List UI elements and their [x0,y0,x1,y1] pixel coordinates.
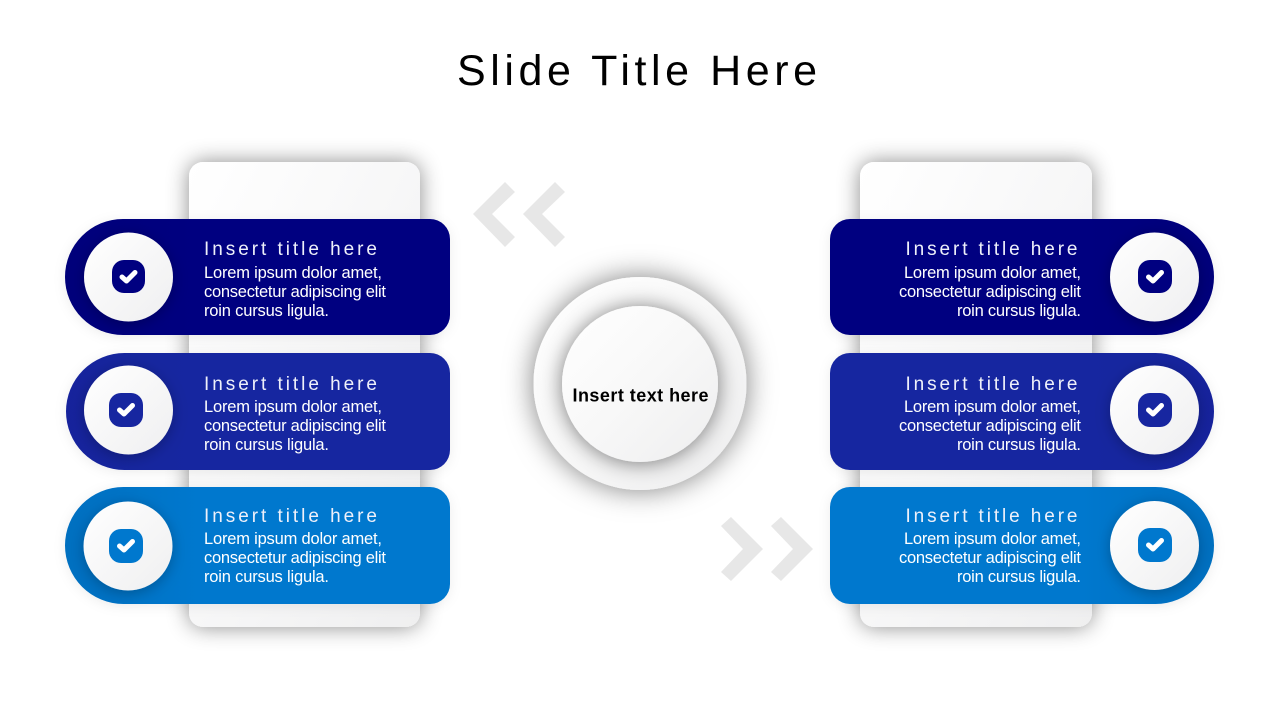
right item 3 [830,487,1214,604]
item text: Lorem ipsum dolor amet, [204,398,382,416]
left item 1 [65,219,450,335]
item text: Lorem ipsum dolor amet, [204,530,382,548]
right item 2 [830,353,1214,470]
item text: roin cursus ligula. [957,436,1081,454]
item text: Lorem ipsum dolor amet, [204,264,382,282]
pill [830,219,1214,335]
item heading: Insert title here [906,374,1078,395]
pill [830,353,1214,470]
item heading: Insert title here [906,506,1078,527]
item text: roin cursus ligula. [204,436,329,454]
pill [830,487,1214,604]
item heading: Insert title here [204,239,377,260]
item text [899,530,1081,586]
arrow: left double chevron [473,182,565,247]
item text: Lorem ipsum dolor amet, [904,398,1081,416]
icon: check badge [1110,366,1199,454]
item text: Lorem ipsum dolor amet, [904,530,1081,548]
item text: roin cursus ligula. [204,302,329,320]
left item 3 [65,487,450,604]
title: Slide Title Here [457,47,817,95]
pill [66,353,450,470]
item text: consectetur adipiscing elit [204,417,386,435]
item text: consectetur adipiscing elit [204,283,386,301]
icon: check badge [84,366,173,454]
central circle [534,277,746,490]
item text: consectetur adipiscing elit [899,283,1081,301]
item heading: Insert title here [906,239,1078,260]
arrow: right double chevron [721,517,813,581]
item text: Lorem ipsum dolor amet, [904,264,1081,282]
icon: check badge [1110,232,1199,322]
item text: consectetur adipiscing elit [899,549,1081,567]
item text [899,398,1081,454]
item heading: Insert title here [204,374,377,395]
item text: consectetur adipiscing elit [899,417,1081,435]
item text: roin cursus ligula. [204,568,329,586]
icon: check badge [84,502,172,590]
pill [65,487,450,604]
item heading: Insert title here [204,506,377,527]
right item 1 [830,219,1214,335]
pill [65,219,450,335]
item text [899,264,1081,320]
item text [204,398,386,454]
panel: right backing card [860,162,1092,627]
item text [204,530,386,586]
center label: Insert text here [572,386,708,406]
panel: left backing card [189,162,420,627]
item text: roin cursus ligula. [957,568,1081,586]
left item 2 [66,353,450,470]
icon: check badge [1110,501,1199,590]
item text: roin cursus ligula. [957,302,1081,320]
outer ring [534,277,746,490]
item text [204,264,386,320]
inner disc [562,306,718,462]
item text: consectetur adipiscing elit [204,549,386,567]
icon: check badge [84,232,173,322]
